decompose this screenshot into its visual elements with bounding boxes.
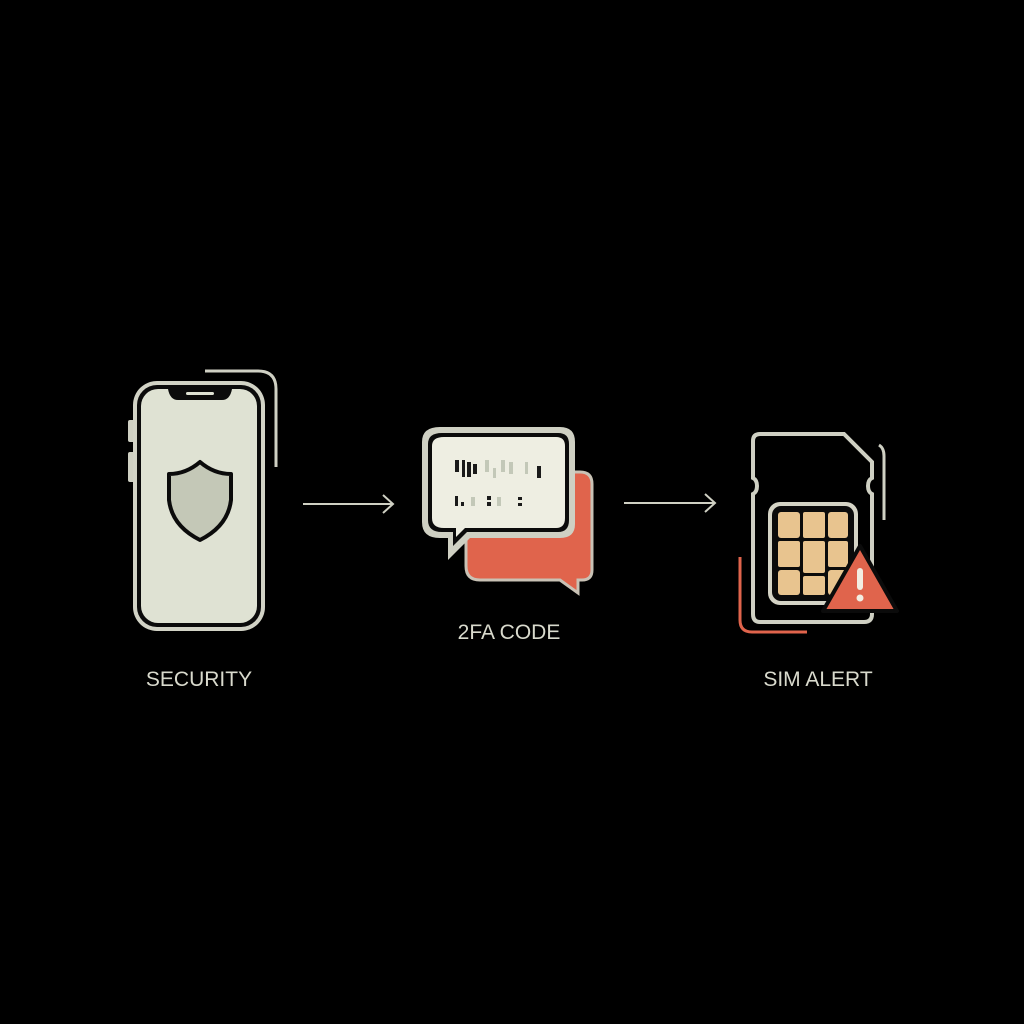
label: 2FA code: 2FA CODE [458, 621, 560, 644]
icon: SIM card with alert [740, 434, 897, 632]
icon: warning triangle [823, 546, 897, 611]
icon: phone with shield [128, 371, 276, 631]
icon: shield [169, 462, 231, 540]
arrow 2 [624, 494, 715, 512]
label: security: SECURITY [146, 668, 252, 691]
arrow 1 [303, 495, 393, 513]
label: SIM alert: SIM ALERT [763, 668, 873, 691]
icon: chat bubbles 2FA [422, 427, 592, 593]
